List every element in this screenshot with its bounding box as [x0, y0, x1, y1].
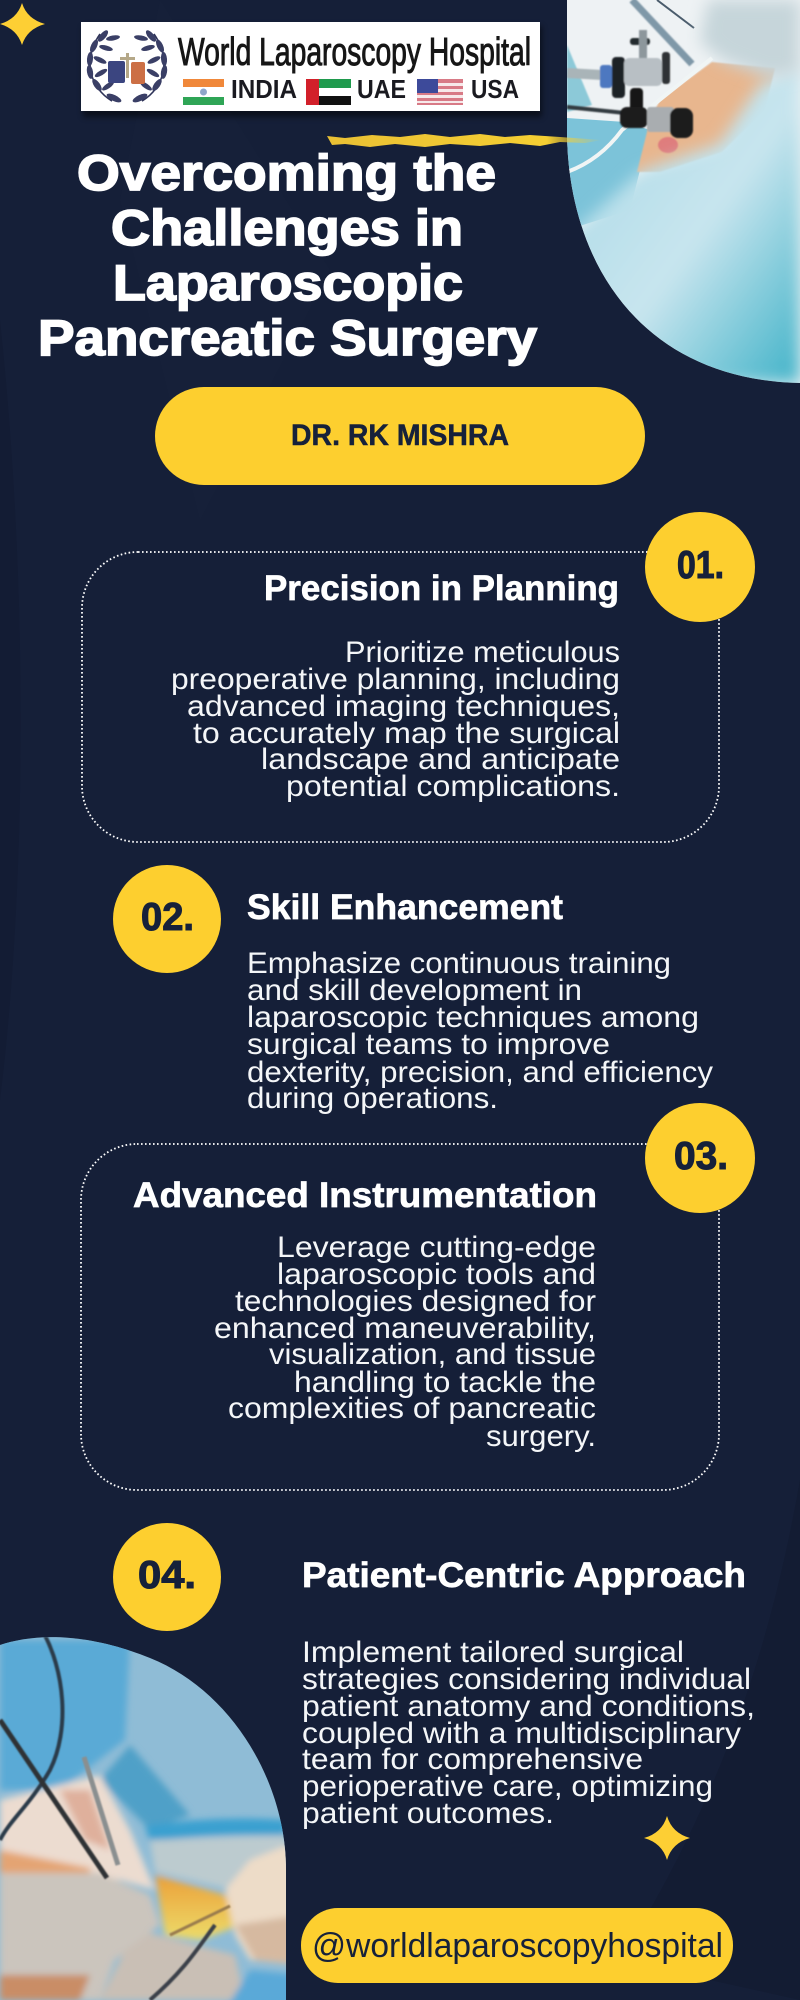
decorative yellow brush stroke	[327, 134, 602, 147]
text block: precision in planning	[171, 636, 620, 803]
image: surgeons' gloved hands operating	[0, 1630, 300, 2000]
flag: UAE	[306, 79, 351, 105]
panel: 01 precision in planning	[82, 512, 755, 842]
badge: 04: 04.	[138, 1554, 196, 1597]
text block: advanced instrumentation	[214, 1231, 596, 1453]
label: UAE: UAE	[357, 74, 406, 104]
text block: skill enhancement: laparoscopic techniques among	[247, 1001, 699, 1034]
text block: skill enhancement: and skill development in	[247, 974, 582, 1007]
badge: 04	[113, 1523, 221, 1631]
text block: advanced instrumentation: Leverage cutting-edge	[277, 1231, 596, 1264]
badge: 02	[113, 865, 221, 973]
title: Challenges in	[111, 200, 463, 256]
text block: patient-centric approach: perioperative care, optimizing	[302, 1770, 713, 1803]
title: Overcoming the	[77, 145, 496, 201]
text block: patient-centric approach: Implement tailored surgical	[302, 1636, 684, 1669]
badge: 02: 02.	[141, 896, 194, 939]
text block: patient-centric approach: patient anatomy and conditions,	[302, 1690, 755, 1723]
text block: patient-centric approach: strategies considering individual	[302, 1663, 751, 1696]
text block: precision in planning: landscape and anticipate	[261, 743, 620, 776]
panel: 03 advanced instrumentation	[81, 1103, 755, 1490]
badge: 03: 03.	[674, 1135, 728, 1178]
label: India: INDIA	[231, 74, 297, 104]
badge: 03	[645, 1103, 755, 1213]
emblem: wreath and shields	[86, 29, 168, 104]
icon: sparkle star bottom right	[644, 1816, 690, 1860]
author pill	[155, 387, 645, 485]
label: USA: USA	[471, 74, 519, 104]
text block: skill enhancement: Emphasize continuous training	[247, 947, 671, 980]
text block: advanced instrumentation: technologies designed for	[235, 1285, 596, 1318]
heading: advanced instrumentation: Advanced Instrumentation	[133, 1176, 597, 1215]
lower trocar	[567, 88, 693, 138]
badge: 01: 01.	[677, 544, 724, 587]
text block: patient-centric approach: patient outcomes.	[302, 1797, 554, 1830]
text block: advanced instrumentation: visualization, and tissue	[269, 1338, 596, 1371]
flag: USA	[417, 79, 463, 105]
text block: precision in planning: potential complications.	[286, 770, 620, 803]
text block: precision in planning: preoperative planning, including	[171, 663, 620, 696]
icon: sparkle star top left	[0, 3, 45, 45]
author pill: DR. RK MISHRA	[291, 419, 509, 452]
text block: patient-centric approach: coupled with a multidisciplinary	[302, 1717, 741, 1750]
text block: skill enhancement: dexterity, precision, and efficiency	[247, 1056, 713, 1089]
text block: precision in planning: to accurately map the surgical	[193, 717, 620, 750]
title: Pancreatic Surgery	[38, 310, 537, 366]
heading: patient-centric approach: Patient-Centric Approach	[302, 1556, 746, 1595]
heading: precision in planning: Precision in Planning	[264, 569, 619, 608]
text block: advanced instrumentation: handling to tackle the	[294, 1366, 596, 1399]
logo: World Laparoscopy Hospital	[81, 22, 542, 117]
sutures and forceps	[0, 1630, 230, 2000]
social handle pill	[301, 1908, 733, 1983]
text block: patient-centric approach: team for comprehensive	[302, 1743, 643, 1776]
social handle pill: @worldlaparoscopyhospital	[312, 1927, 723, 1965]
text block: patient-centric approach	[302, 1636, 755, 1830]
title	[38, 145, 537, 366]
logo name: World Laparoscopy Hospital	[178, 31, 531, 74]
text block: precision in planning: Prioritize meticulous	[345, 636, 620, 669]
image: laparoscopic instruments at surgery	[560, 0, 800, 390]
text block: skill enhancement	[247, 947, 713, 1115]
flag: India	[183, 79, 224, 105]
badge: 01	[645, 512, 755, 622]
text block: skill enhancement: surgical teams to improve	[247, 1028, 610, 1061]
title: Laparoscopic	[113, 255, 463, 311]
text block: advanced instrumentation: complexities of pancreatic	[228, 1392, 596, 1425]
heading: skill enhancement: Skill Enhancement	[247, 888, 563, 927]
text block: advanced instrumentation: surgery.	[486, 1420, 596, 1453]
panel: 02 skill enhancement	[113, 865, 713, 1115]
text block: advanced instrumentation: enhanced maneuverability,	[214, 1312, 596, 1345]
text block: precision in planning: advanced imaging techniques,	[187, 690, 620, 723]
upper trocar	[567, 30, 670, 98]
panel: 04 patient-centric approach	[113, 1523, 755, 1830]
text block: advanced instrumentation: laparoscopic tools and	[277, 1258, 596, 1291]
text block: skill enhancement: during operations.	[247, 1082, 498, 1115]
